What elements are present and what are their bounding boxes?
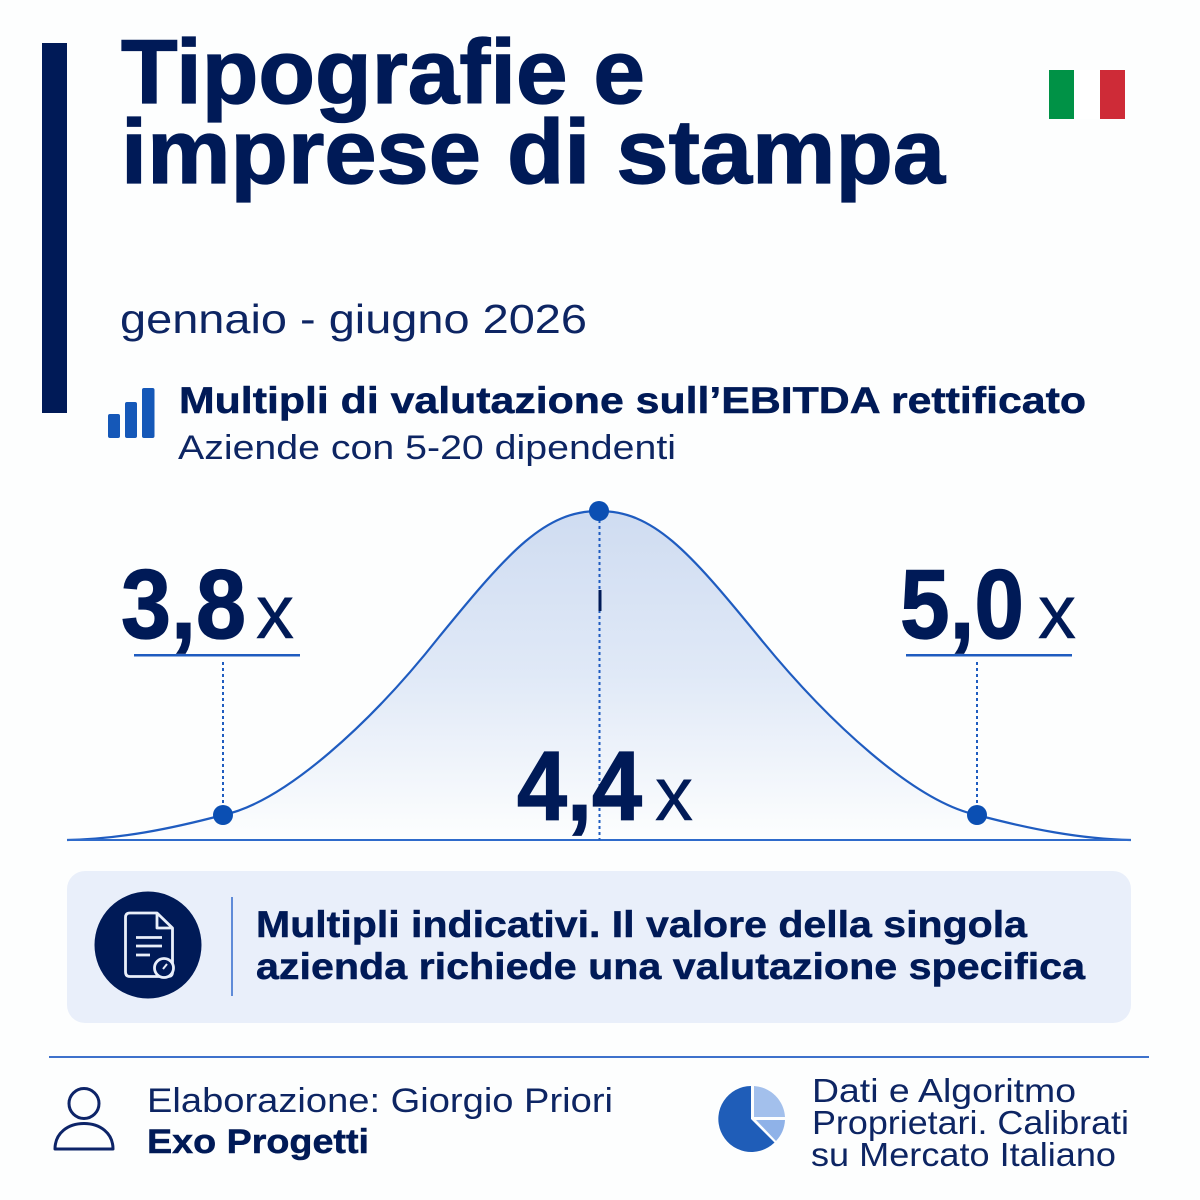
disclaimer text: Multipli indicativi. Il valore della singola [256, 904, 1027, 945]
left dotted line [222, 662, 224, 815]
median tick mark [598, 590, 602, 611]
low point [213, 805, 233, 825]
baseline axis [67, 839, 1131, 841]
icon: Italian flag [1049, 70, 1125, 119]
data source note [811, 1072, 1129, 1173]
disclaimer text [256, 904, 1085, 987]
icon: bar chart [108, 388, 154, 438]
median point [589, 501, 609, 521]
data source note: Dati e Algoritmo [812, 1072, 1076, 1109]
right dotted line [976, 662, 978, 815]
data source note: su Mercato Italiano [811, 1136, 1116, 1173]
section heading [178, 380, 1086, 467]
panel: disclaimer [67, 871, 1131, 1023]
low value 3,8x: 3,8 [121, 549, 246, 659]
disclaimer text: azienda richiede una valutazione specifica [256, 946, 1085, 987]
author credit [147, 1082, 613, 1161]
title: Tipografie e [121, 22, 645, 123]
footer rule [49, 1056, 1149, 1058]
chart: bell curve of multiples [67, 501, 1131, 841]
period subtitle: gennaio - giugno 2026 [120, 296, 587, 342]
icon: person [55, 1088, 113, 1149]
median value 4,4x: 4,4 [517, 731, 642, 841]
title: imprese di stampa [121, 102, 946, 203]
curve fill [67, 511, 1131, 840]
icon: pie chart [718, 1086, 785, 1152]
curve line [67, 511, 1131, 840]
icon: document [94, 892, 202, 998]
author credit: Elaborazione: Giorgio Priori [147, 1082, 613, 1120]
title [121, 22, 946, 203]
low value 3,8x: x [256, 570, 294, 655]
section heading: Multipli di valutazione sull’EBITDA rettificato [179, 380, 1086, 421]
median dotted line [598, 520, 600, 840]
high value 5,0x: x [1038, 570, 1076, 655]
high value 5,0x: 5,0 [900, 549, 1024, 659]
author credit: Exo Progetti [147, 1123, 369, 1161]
accent bar [42, 43, 67, 413]
data source note: Proprietari. Calibrati [812, 1104, 1129, 1141]
section heading: Aziende con 5-20 dipendenti [178, 429, 676, 467]
median value 4,4x: x [655, 752, 693, 837]
panel divider [231, 897, 233, 996]
high point [967, 805, 987, 825]
